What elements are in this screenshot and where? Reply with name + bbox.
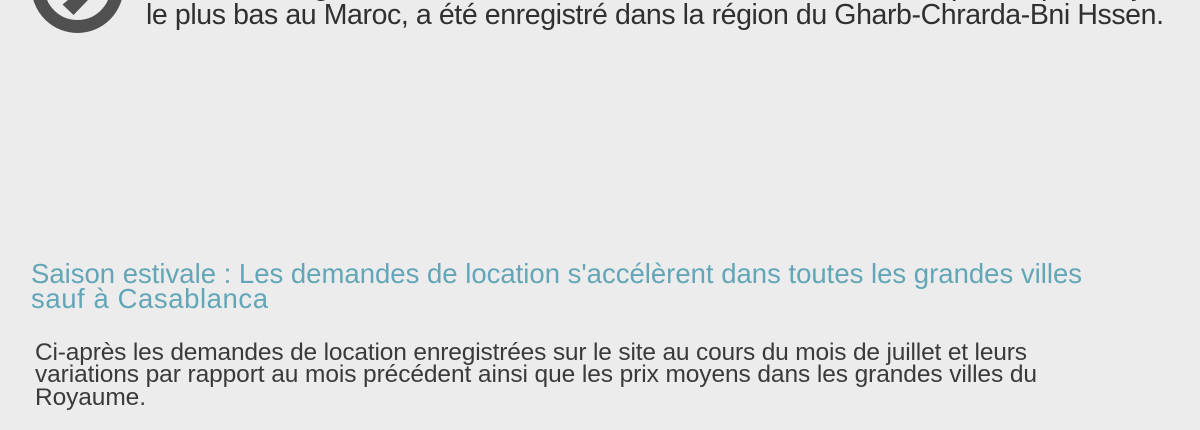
heading: summer season — [31, 258, 1082, 314]
icon: clipped circled check mark — [38, 0, 117, 26]
heading: summer season: sauf à Casablanca — [31, 283, 269, 314]
text: clipped descenders of the line above — [313, 0, 1146, 2]
text block: introduction: variations par rapport au mois précédent ainsi que les prix moyens dans les grandes villes du — [35, 361, 1037, 388]
heading: summer season: Saison estivale : Les demandes de location s'accélèrent dans toutes les grandes villes — [31, 258, 1082, 289]
text block: introduction: Royaume. — [35, 384, 146, 411]
text block: introduction: Ci-après les demandes de location enregistrées sur le site au cours du mois de juillet et leurs — [35, 339, 1027, 366]
text block: introduction — [35, 339, 1037, 411]
